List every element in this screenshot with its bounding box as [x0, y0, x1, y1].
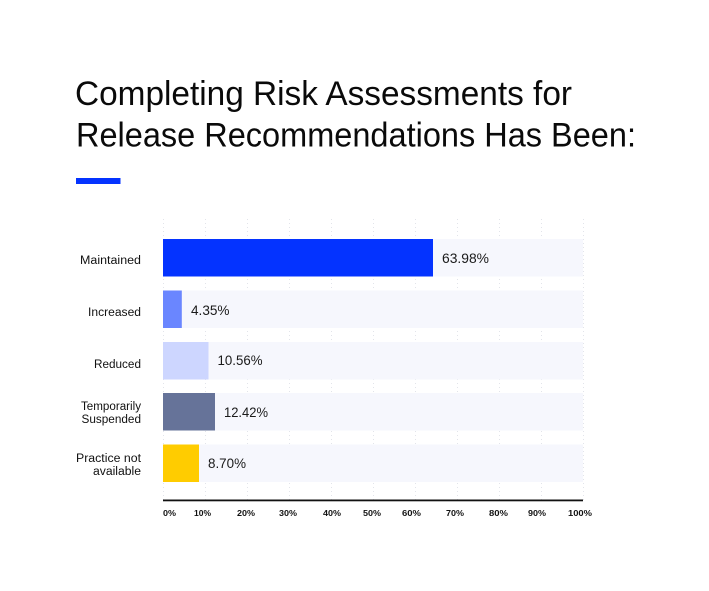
x axis: 60%: [402, 509, 421, 518]
bar: Practice not available: 8.70%: [208, 456, 246, 471]
bar: Reduced: 10.56%: [218, 353, 262, 368]
bar: Temporarily Suspended: Suspended: [82, 414, 141, 426]
bar: Increased: [88, 290, 230, 328]
x axis: 80%: [489, 509, 508, 518]
title: Completing Risk Assessments for: [75, 75, 572, 113]
bar: Maintained: [80, 239, 489, 276]
x axis: 40%: [323, 509, 341, 518]
x axis: [163, 500, 592, 518]
x axis: 100%: [568, 509, 592, 518]
x axis: 90%: [528, 509, 546, 518]
bar background tracks: [163, 239, 583, 482]
title accent bar: [76, 178, 120, 184]
bar chart: [76, 219, 592, 518]
x axis: 30%: [279, 509, 297, 518]
title: [75, 75, 636, 154]
bar: Maintained: Maintained: [80, 255, 141, 267]
x axis: 70%: [446, 509, 464, 518]
bar: Temporarily Suspended: 12.42%: [224, 405, 268, 420]
x axis: 0%: [163, 509, 176, 518]
bar: Practice not available: Practice not: [76, 453, 142, 465]
bar: Practice not available: available: [93, 466, 141, 478]
x axis: 50%: [363, 509, 381, 518]
bar: Reduced: Reduced: [94, 359, 141, 371]
title: Release Recommendations Has Been:: [76, 116, 636, 154]
bar: Reduced: [94, 342, 262, 380]
bar: Maintained: 63.98%: [442, 251, 489, 266]
bar: Increased: Increased: [88, 307, 141, 319]
x axis: 10%: [194, 509, 211, 518]
bar: Temporarily Suspended: [81, 393, 268, 430]
bar: Increased: 4.35%: [191, 303, 230, 318]
bar: Practice not available: [76, 444, 246, 482]
bar: Temporarily Suspended: Temporarily: [81, 401, 141, 413]
x axis: 20%: [237, 509, 255, 518]
